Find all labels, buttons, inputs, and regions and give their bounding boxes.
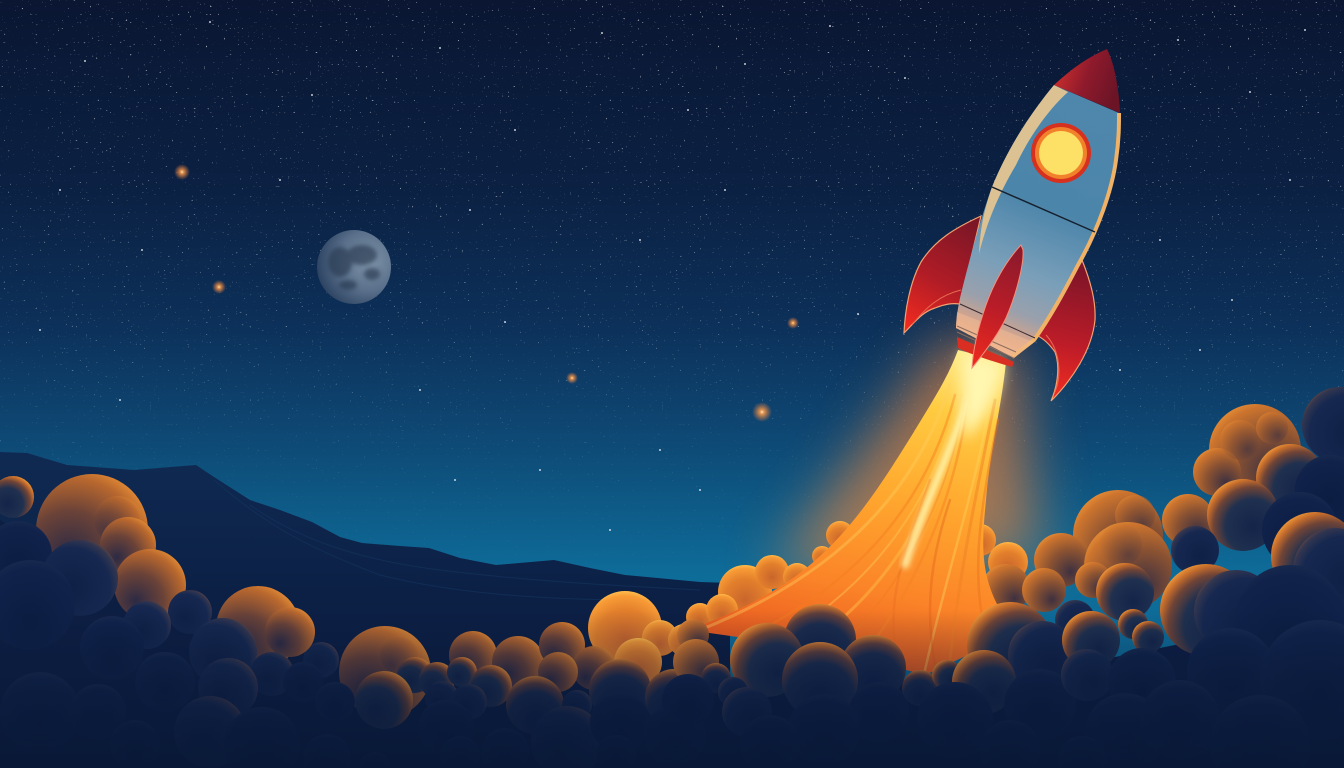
body left highlight xyxy=(979,85,1068,254)
plume bright core xyxy=(905,400,968,565)
rocket exhaust plume xyxy=(688,350,1006,675)
mountain range xyxy=(0,452,730,768)
front left cloud cluster xyxy=(0,474,706,768)
porthole window xyxy=(1031,123,1091,183)
middle clouds: warm lit puffs xyxy=(303,591,718,718)
nose cone xyxy=(1054,49,1120,113)
rocket right fin xyxy=(1036,260,1095,401)
body seam xyxy=(992,187,1095,232)
front centre and right cloud cluster xyxy=(662,512,1344,768)
moon xyxy=(317,230,391,304)
glowing orange stars xyxy=(174,164,799,422)
rocket centre fin xyxy=(972,245,1023,368)
rocket engine nozzle xyxy=(957,337,1014,367)
body right rim xyxy=(1012,113,1119,357)
left cloud dark mass xyxy=(0,520,1344,768)
engine section bands xyxy=(957,304,1035,358)
rocket body xyxy=(956,85,1119,357)
rocket xyxy=(904,49,1120,401)
plume bright top xyxy=(962,352,1003,440)
exhaust glow xyxy=(770,340,1040,575)
rocket left fin xyxy=(904,216,981,333)
back clouds: orange lit puffs xyxy=(686,521,1028,631)
plume strands xyxy=(700,385,998,670)
bottom shade xyxy=(0,610,1344,768)
right cloud cluster xyxy=(982,387,1344,640)
